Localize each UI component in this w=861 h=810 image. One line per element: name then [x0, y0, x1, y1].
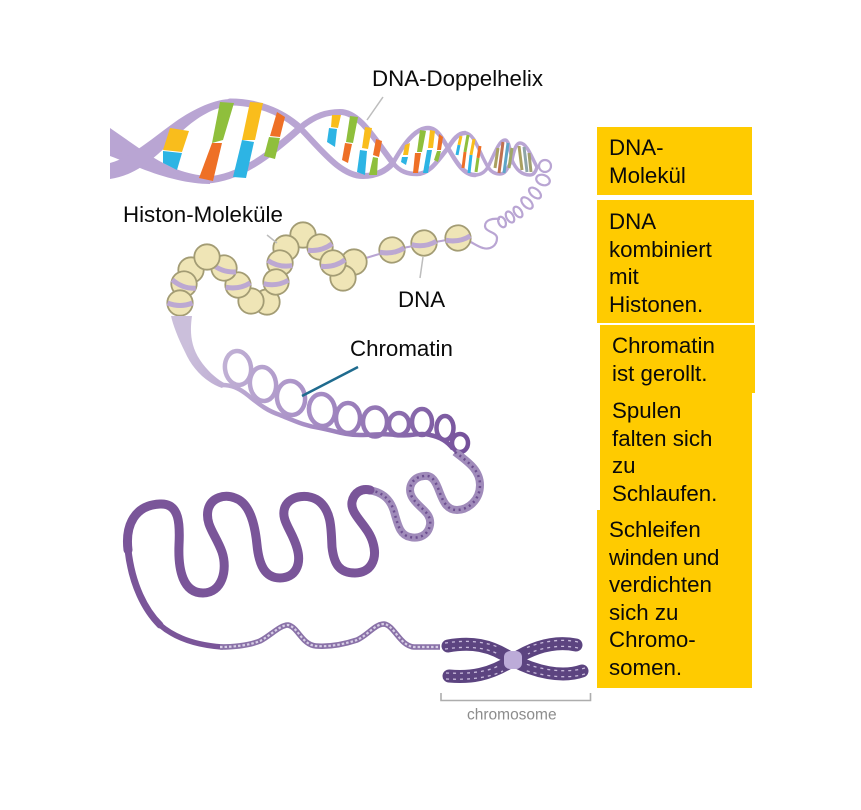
label: Histon-Moleküle: Histon-Moleküle: [123, 202, 283, 227]
text: Chromatin ist gerollt: Chromatin: [612, 333, 715, 358]
leader: Histon-Moleküle: [267, 235, 277, 243]
helix left ribbon ends: [110, 99, 232, 184]
helix base pairs, third turn: [401, 130, 443, 173]
text: DNA-Molekül: [609, 135, 686, 188]
text: DNA kombiniert mit Histonen: kombiniert: [609, 236, 712, 262]
chromosome fibre texture: [445, 640, 585, 679]
label: Chromatin: Chromatin: [350, 336, 453, 361]
leader: DNA: [420, 257, 423, 278]
text: Spulen falten sich zu Schlaufen: falten sich: [612, 426, 712, 450]
text: Schleifen winden und verdichten: Chromo-: [609, 627, 696, 652]
label: DNA: DNA: [398, 287, 445, 312]
text: Schleifen winden und verdichten: [609, 517, 719, 680]
DNA coil linking helix to histones: [458, 160, 551, 249]
dotted chromatin tube: [368, 452, 480, 538]
text: Schleifen winden und verdichten: somen.: [609, 654, 682, 680]
chromosome bracket: [441, 693, 590, 700]
text: DNA kombiniert mit Histonen: DNA: [609, 209, 656, 234]
panel: Spulen falten sich zu Schlaufen: [600, 390, 752, 511]
beaded fibre to chromosome: [220, 624, 440, 647]
chromosome: [445, 640, 585, 679]
panel: DNA kombiniert mit Histonen: [597, 200, 754, 323]
leader: DNA-Doppelhelix: [367, 97, 383, 120]
panel: DNA-Molekül: [597, 127, 752, 195]
text: Schleifen winden und verdichten: Schleifen: [609, 517, 701, 542]
histone beads on DNA: [167, 222, 473, 316]
text: Spulen falten sich zu Schlaufen: Spulen: [612, 398, 681, 423]
text: DNA kombiniert mit Histonen: [609, 209, 712, 316]
text: Spulen falten sich zu Schlaufen: zu: [612, 453, 636, 478]
helix strand one: [207, 112, 537, 180]
text: Spulen falten sich zu Schlaufen: Schlaufen.: [612, 480, 717, 506]
text: Chromatin ist gerollt: ist gerollt.: [612, 360, 707, 386]
text: DNA-Molekül: DNA-: [609, 135, 664, 160]
text: Schleifen winden und verdichten: sich zu: [609, 600, 678, 624]
label: chromosome: chromosome: [467, 706, 557, 724]
helix base pairs, small turns: [457, 135, 531, 173]
chromosome arms: [448, 644, 582, 677]
helix base pairs, first turn: [163, 102, 285, 181]
helix strand two: [230, 102, 537, 176]
leader: Chromatin: [302, 367, 358, 396]
helix base pairs, second turn: [327, 115, 382, 175]
text: Chromatin ist gerollt: [612, 333, 715, 386]
label: DNA-Doppelhelix: DNA-Doppelhelix: [372, 66, 543, 91]
DNA double helix: [110, 99, 537, 184]
condensed chromatin loops: [127, 490, 374, 647]
text: DNA-Molekül: Molekül: [609, 162, 686, 188]
text: Spulen falten sich zu Schlaufen: [612, 398, 717, 506]
text: DNA kombiniert mit Histonen: mit: [609, 264, 639, 289]
text: Schleifen winden und verdichten: verdichten: [609, 572, 712, 597]
text: Schleifen winden und verdichten: winden und: [609, 544, 719, 570]
chromosome centromere: [504, 651, 522, 669]
chromatin coil: [171, 316, 468, 452]
panel: Chromatin ist gerollt: [600, 325, 755, 393]
panel: Schleifen winden und verdichten: [597, 510, 752, 688]
text: DNA kombiniert mit Histonen: Histonen.: [609, 292, 703, 316]
